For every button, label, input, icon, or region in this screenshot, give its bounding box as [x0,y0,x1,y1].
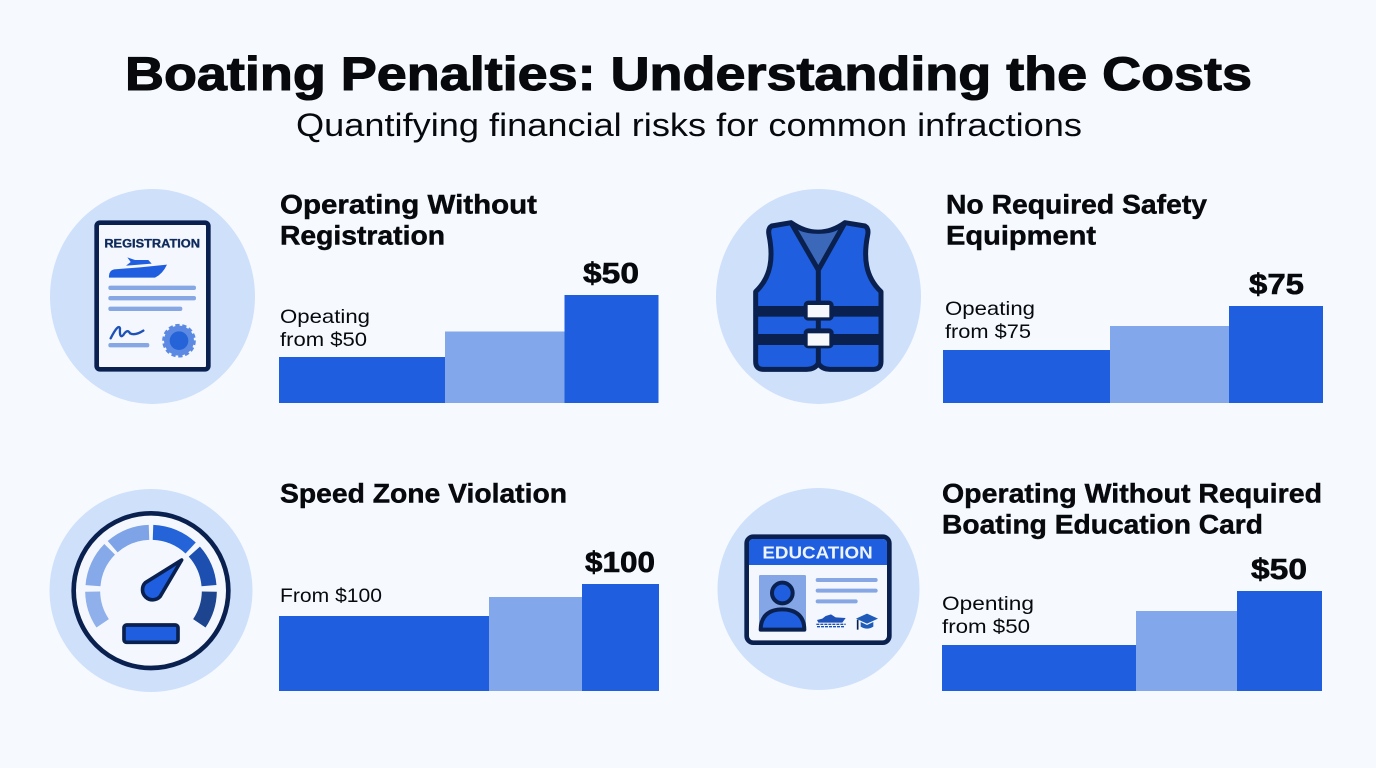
heading: Operating Without Required [942,478,1322,508]
heading: Equipment [946,220,1096,250]
icon: registration document: REGISTRATION [104,236,200,250]
bar chart [279,584,659,691]
title: Boating Penalties: Understanding the Costs [125,47,1252,100]
panel: speed zone violation [50,478,659,692]
icon: gauge needle [143,560,182,600]
icon: gauge readout [124,625,178,642]
bar label: from $50 [942,616,1030,638]
bar label: from $50 [280,329,367,351]
heading: Operating Without [280,190,537,220]
bar label: Openting [942,593,1034,615]
icon: education card [718,488,920,690]
heading [942,478,1322,540]
value: $75 [1249,269,1304,301]
bar label: From $100 [280,585,382,607]
bar label: Opeating [945,298,1035,320]
icon: speedometer [50,489,252,692]
bar label [945,298,1035,343]
value: $50 [1251,554,1307,586]
bar chart [279,295,658,403]
panel: operating without required boating education card [718,478,1322,691]
icon: registration document [50,189,255,404]
bar label: from $75 [945,321,1031,343]
bar label [942,593,1034,638]
bar label: Opeating [280,306,370,328]
heading: Registration [280,220,445,250]
heading [946,190,1207,250]
heading: Boating Education Card [942,510,1263,540]
heading: Speed Zone Violation [280,478,567,508]
subtitle: Quantifying financial risks for common infractions [296,107,1082,143]
bar label [280,306,370,351]
bar chart [942,591,1322,691]
icon: education card: EDUCATION [762,542,873,562]
value: $50 [583,258,639,290]
heading [280,190,537,250]
panel: operating without registration [50,189,658,404]
panel: no required safety equipment [716,189,1323,404]
bar chart [943,306,1323,403]
value: $100 [585,547,655,579]
heading: No Required Safety [946,190,1207,220]
icon: life vest [716,189,921,404]
